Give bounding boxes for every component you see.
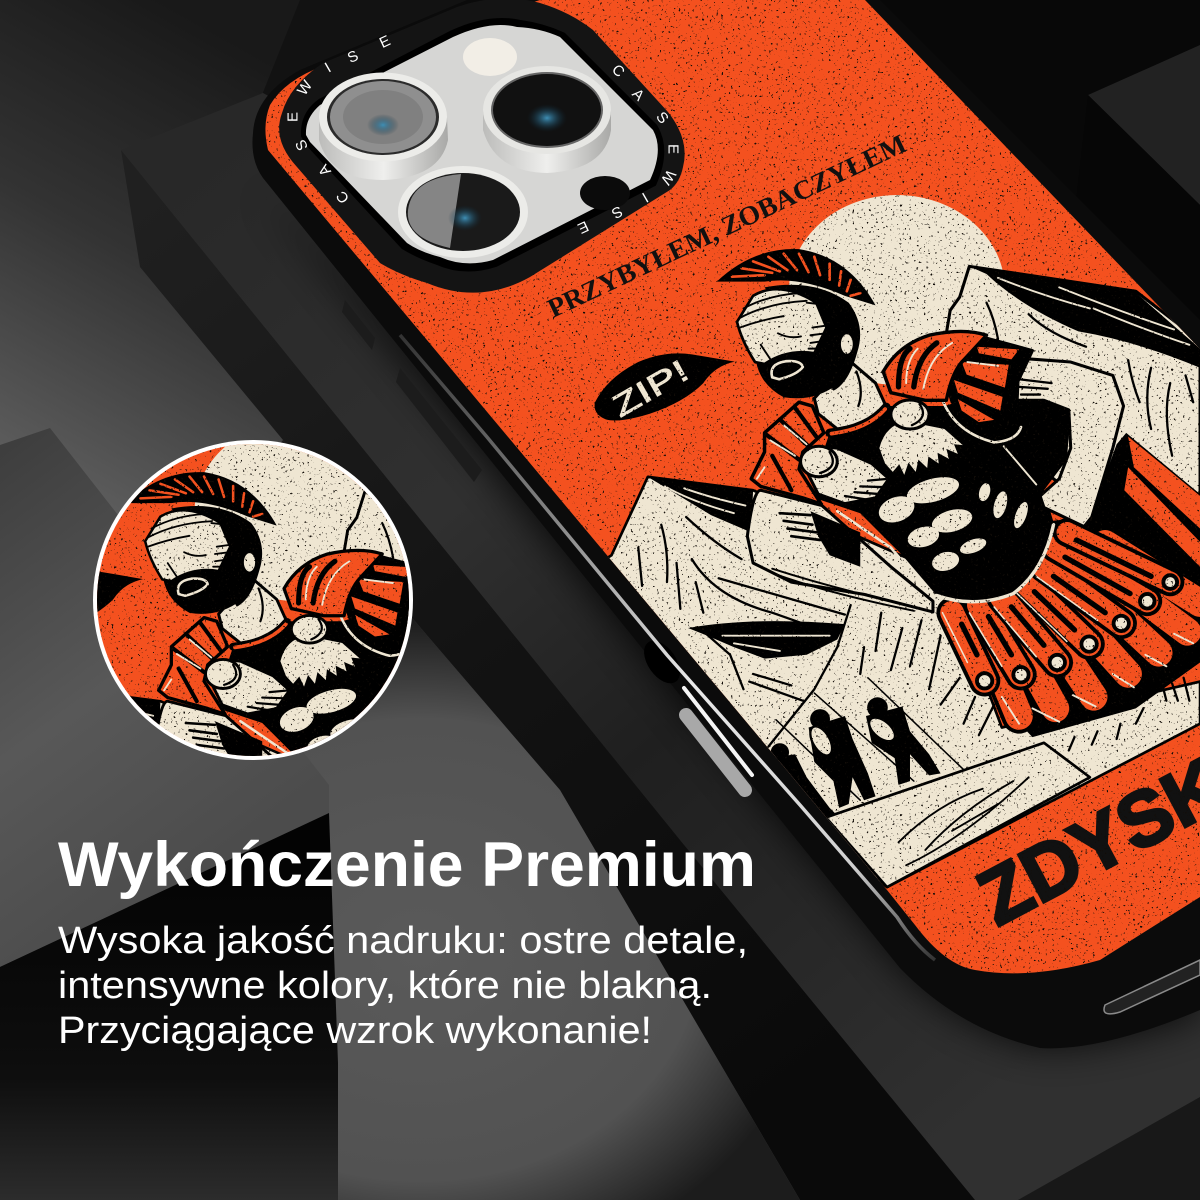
zoom inset circle: [93, 440, 413, 760]
camera island: [279, 0, 685, 293]
body text: [58, 920, 748, 1052]
CASEWISE ring lettering, right: [575, 61, 682, 237]
CASEWISE ring lettering, right: S: [609, 202, 625, 222]
CASEWISE ring lettering, left: [284, 32, 393, 207]
CASEWISE ring lettering, left: A: [315, 161, 335, 179]
CASEWISE ring lettering, left: C: [333, 187, 353, 207]
CASEWISE ring lettering, left: S: [345, 47, 361, 67]
CASEWISE ring lettering, left: E: [284, 112, 302, 122]
CASEWISE ring lettering, left: I: [322, 60, 334, 76]
glossy rim highlight: [400, 335, 935, 960]
CASEWISE ring lettering, left: S: [292, 137, 312, 153]
body text: Wysoka jakość nadruku: ostre detale,: [58, 920, 748, 962]
phone with case: [252, 0, 1200, 1048]
phone body and black bumper: [252, 0, 1200, 1048]
lens top right: [483, 66, 611, 173]
CASEWISE ring lettering, right: C: [608, 61, 628, 81]
camera glass: [306, 25, 658, 263]
CASEWISE ring lettering, right: E: [575, 217, 591, 237]
lens top left: [319, 72, 448, 180]
CASEWISE ring lettering, right: W: [656, 166, 679, 188]
microphone hole: [580, 176, 630, 210]
island frame: [279, 0, 685, 293]
phone shadow: [260, 190, 1200, 1048]
CASEWISE ring lettering, right: E: [664, 144, 682, 154]
speech bubble text: ZIP!: [606, 353, 695, 424]
CASEWISE ring lettering, right: S: [652, 109, 672, 127]
CASEWISE ring lettering, left: W: [294, 77, 317, 99]
body text: Przyciągające wzrok wykonanie!: [58, 1010, 652, 1052]
CASEWISE ring lettering, right: I: [639, 189, 651, 205]
heading: Wykończenie Premium: [58, 830, 756, 900]
CASEWISE ring lettering, left: E: [377, 32, 393, 52]
side buttons: [342, 300, 1200, 1014]
CASEWISE ring lettering, right: A: [628, 85, 648, 105]
body text: intensywne kolory, które nie blakną.: [58, 965, 712, 1007]
printed case illustration: [260, 0, 1200, 980]
inner ring: [306, 23, 659, 267]
illustration slogan: PRZYBYŁEM, ZOBACZYŁEM: [543, 128, 911, 323]
lens bottom: [398, 166, 528, 258]
flash: [463, 38, 517, 76]
